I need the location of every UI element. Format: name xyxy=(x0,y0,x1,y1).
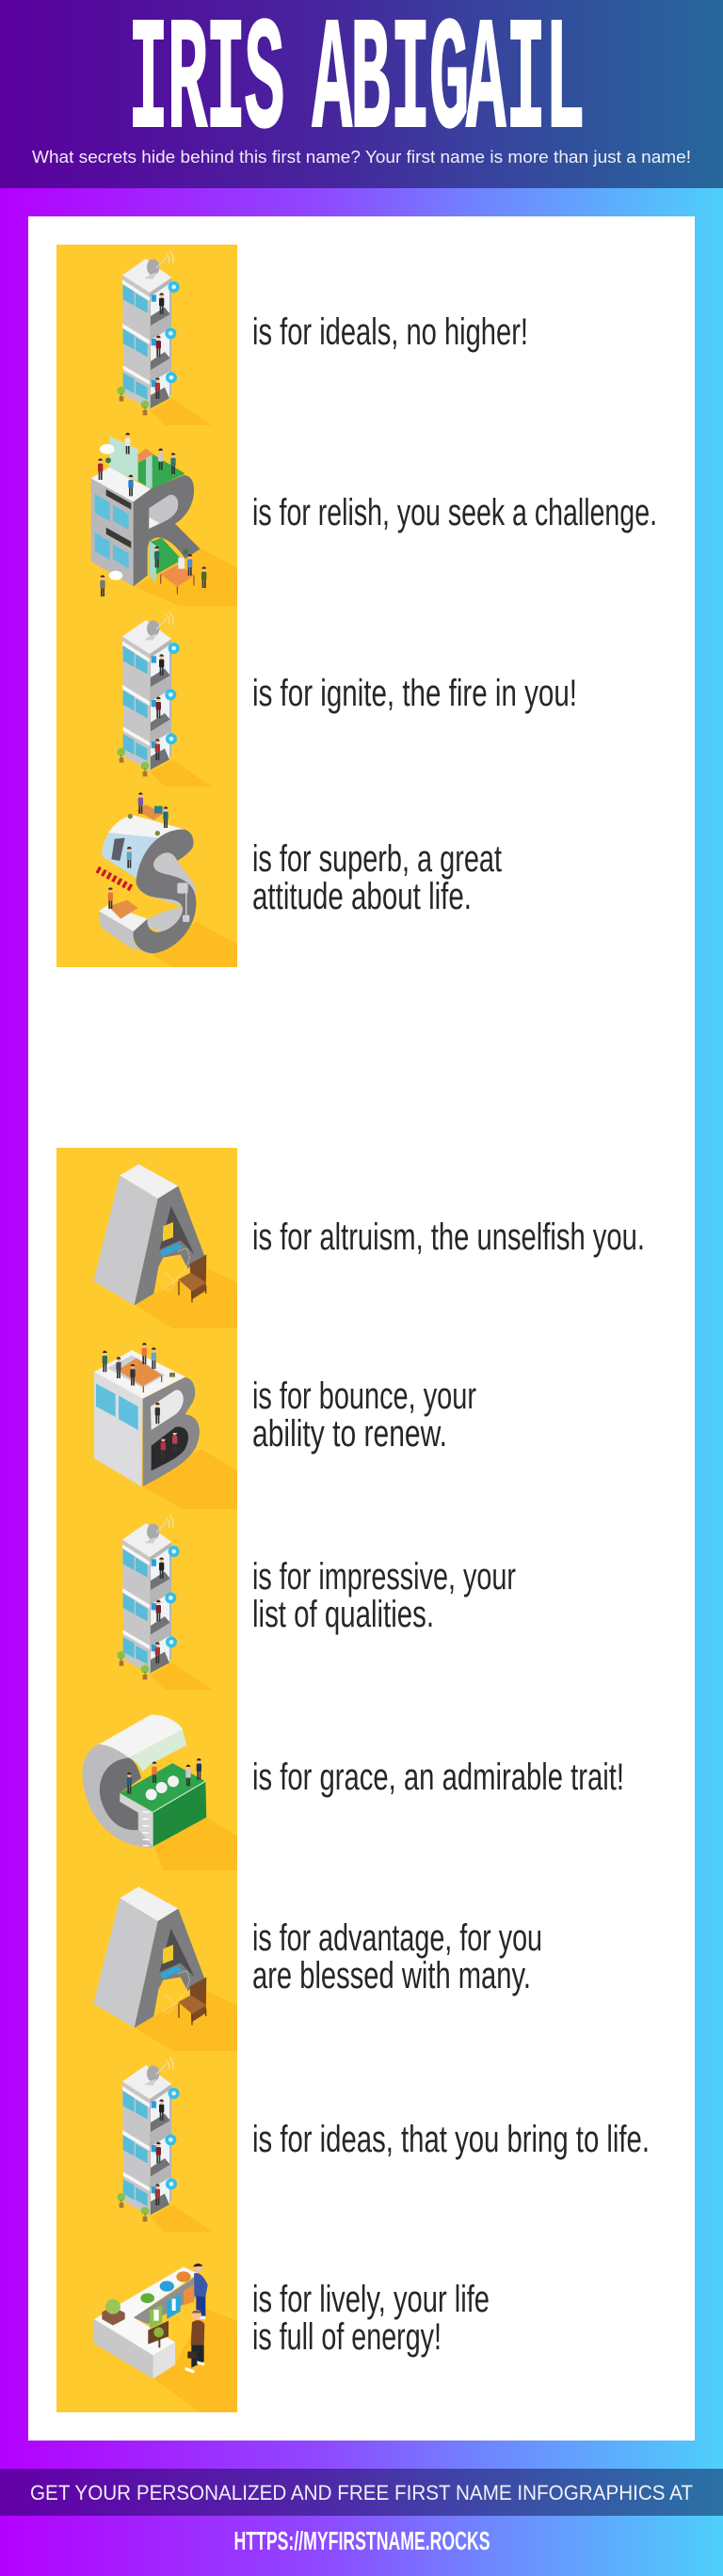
icon: letter R building xyxy=(91,433,237,606)
line: I: is for ideals, no higher! xyxy=(252,311,528,353)
panel: first name IRIS xyxy=(56,245,657,967)
footer call to action: GET YOUR PERSONALIZED AND FREE FIRST NAME INFOGRAPHICS AT xyxy=(30,2481,693,2504)
line: A first: is for advantage, for you xyxy=(252,1917,542,1959)
line: I second: list of qualities. xyxy=(252,1594,434,1635)
line: A second: are blessed with many. xyxy=(252,1955,531,1996)
icon: letter I building xyxy=(117,1516,212,1690)
icon: letter I building xyxy=(117,612,212,787)
line: S second: attitude about life. xyxy=(252,876,472,917)
icon: letter I building xyxy=(117,2058,212,2232)
line: I: is for ignite, the fire in you! xyxy=(252,673,577,714)
line: S first: is for superb, a great xyxy=(252,838,502,880)
line: I first: is for impressive, your xyxy=(252,1556,516,1598)
line: B second: ability to renew. xyxy=(252,1413,447,1455)
line: B first: is for bounce, your xyxy=(252,1375,476,1417)
header band xyxy=(0,0,723,188)
icon: letter S building xyxy=(97,792,237,967)
white content panel xyxy=(28,216,695,2441)
icon: letter G building xyxy=(83,1715,237,1870)
line: L second: is full of energy! xyxy=(252,2316,442,2358)
icon: letter A building xyxy=(93,1164,237,1328)
icon: letter L recycling station xyxy=(93,2264,237,2412)
line: L first: is for lively, your life xyxy=(252,2279,490,2320)
subtitle: What secrets hide behind this first name? Your first name is more than just a name! xyxy=(32,147,691,167)
icon: letter B building xyxy=(94,1343,237,1509)
footer band xyxy=(0,2469,723,2516)
yellow column: first name xyxy=(56,245,237,967)
icon: letter I building xyxy=(117,251,212,425)
footer url: HTTPS://MYFIRSTNAME.ROCKS xyxy=(233,2526,490,2555)
yellow column: second name xyxy=(56,1148,237,2412)
icon: letter A building xyxy=(93,1886,237,2051)
panel: middle and last name ABIGAIL xyxy=(56,1148,650,2412)
